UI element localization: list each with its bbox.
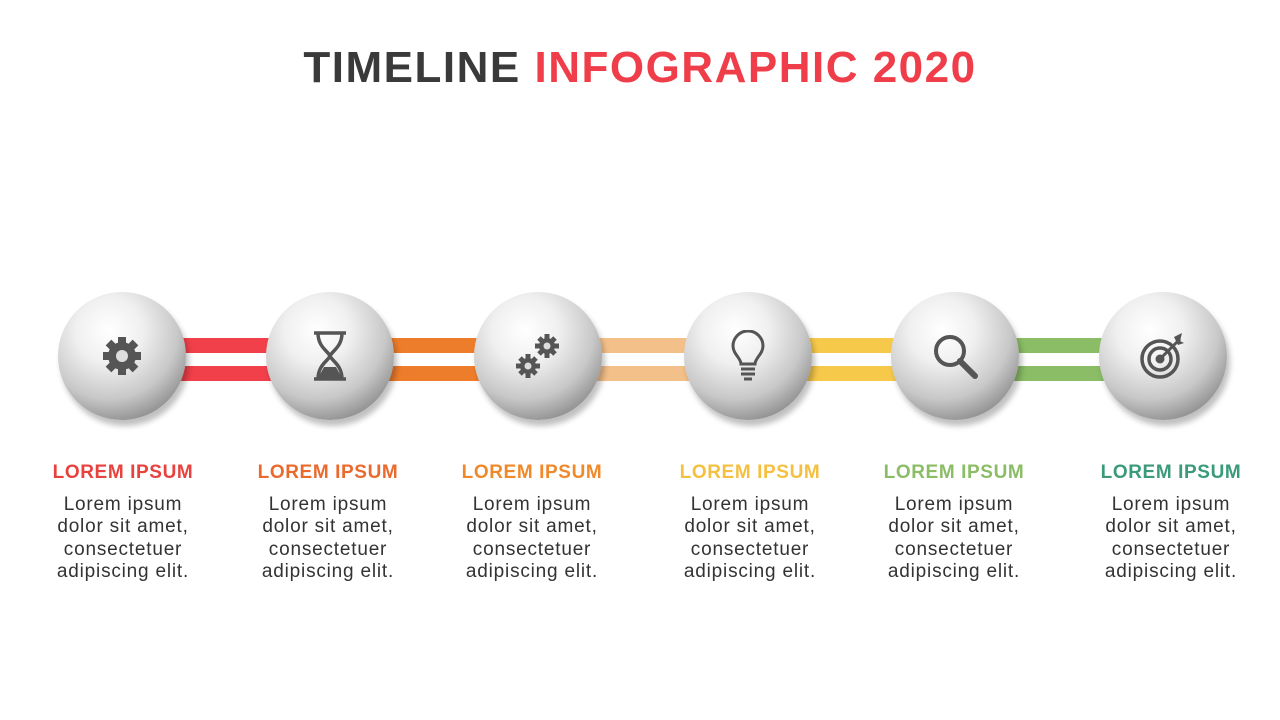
text 2: adipiscing elit.: [262, 561, 394, 582]
text 6: Lorem ipsum: [1112, 494, 1230, 515]
text 2: Lorem ipsum: [269, 494, 387, 515]
text 3: LOREM IPSUM: [462, 462, 602, 483]
text 5: consectetuer: [895, 539, 1013, 560]
text 4: dolor sit amet,: [684, 516, 816, 537]
title: TIMELINE INFOGRAPHIC 2020: [303, 43, 977, 92]
sphere 1: gear: [58, 292, 186, 420]
text 6: adipiscing elit.: [1105, 561, 1237, 582]
text 1: Lorem ipsum: [64, 494, 182, 515]
text 5: LOREM IPSUM: [884, 462, 1024, 483]
text 6: LOREM IPSUM: [1101, 462, 1241, 483]
text 1: dolor sit amet,: [57, 516, 189, 537]
sphere 5: magnifier: [891, 292, 1019, 420]
text 4: consectetuer: [691, 539, 809, 560]
connectors: [181, 338, 1104, 381]
text 5: [884, 462, 1024, 582]
text 3: dolor sit amet,: [466, 516, 598, 537]
text 3: consectetuer: [473, 539, 591, 560]
text 6: consectetuer: [1112, 539, 1230, 560]
sphere 2: hourglass: [266, 292, 394, 420]
text 1: [53, 462, 193, 582]
text 5: dolor sit amet,: [888, 516, 1020, 537]
text 3: Lorem ipsum: [473, 494, 591, 515]
text 4: adipiscing elit.: [684, 561, 816, 582]
text 2: dolor sit amet,: [262, 516, 394, 537]
text 1: consectetuer: [64, 539, 182, 560]
text 2: consectetuer: [269, 539, 387, 560]
text 1: LOREM IPSUM: [53, 462, 193, 483]
text 2: [258, 462, 398, 582]
text 5: Lorem ipsum: [895, 494, 1013, 515]
text 4: [680, 462, 820, 582]
text 6: dolor sit amet,: [1105, 516, 1237, 537]
text 3: adipiscing elit.: [466, 561, 598, 582]
text 2: LOREM IPSUM: [258, 462, 398, 483]
text 1: adipiscing elit.: [57, 561, 189, 582]
text 3: [462, 462, 602, 582]
text 4: LOREM IPSUM: [680, 462, 820, 483]
text 6: [1101, 462, 1241, 582]
text 4: Lorem ipsum: [691, 494, 809, 515]
sphere 4: bulb: [684, 292, 812, 420]
sphere 6: target: [1099, 292, 1227, 420]
sphere 3: gears: [474, 292, 602, 420]
text 5: adipiscing elit.: [888, 561, 1020, 582]
